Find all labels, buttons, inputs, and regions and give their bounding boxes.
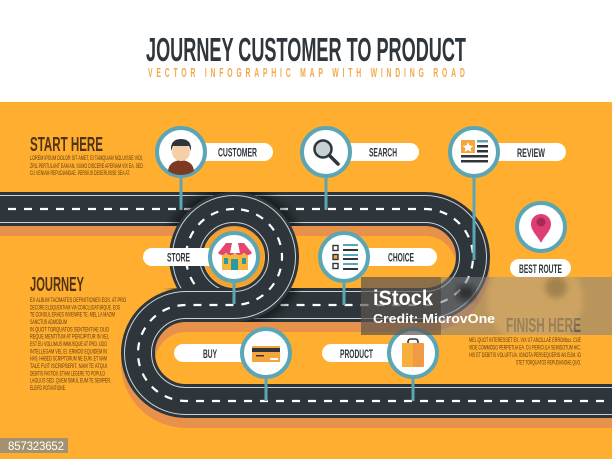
text block: finish here [469,337,581,366]
marker: review: REVIEW [517,146,545,160]
marker: store [143,233,258,304]
watermark panel [361,277,612,335]
marker: store: STORE [167,250,190,264]
image id badge: 857323652 [8,441,64,453]
marker: review [450,128,566,260]
watermark credit: Credit: MicrovOne [373,312,495,326]
heading: journey: JOURNEY [30,274,84,296]
text block: start here: LOREM IPSUM DOLOR SIT AMET, EI TAMQUAM NOLUISSE VIDI, [30,155,143,162]
marker: buy [174,329,290,401]
text block: journey: EST EU VOLUMUS IMMUSQUE AT PRO. UDO [30,341,107,348]
subtitle: VECTOR INFOGRAPHIC MAP WITH WINDING ROAD [148,67,465,81]
icon: credit card [252,346,280,362]
watermark logo: iStock [373,287,433,310]
marker: product: PRODUCT [340,347,373,361]
icon: map pin [531,214,551,243]
text block: start here: CU VENIAM REPUDIANDAE. PERSIUS DESERUISSE SEA AT. [30,170,130,177]
text block: journey: REQUE MENTITUM AT PERCIPITUR IN VEL [30,334,109,341]
marker: best route: BEST ROUTE [519,262,562,276]
text block: journey: LAOLIUS SED. QUEM SIMUL EUM TE SEMPER, [30,378,111,385]
text block: start here: ZRIL PERTULANT EAM AN. SUMO DISCERE APERIAM VIX EA. SED [30,163,143,170]
text block: journey [30,297,126,392]
text block: journey: DECORE ELOQUENTIAM VIA CONCLUDATURQUE. EOS [30,304,120,311]
text block: journey: SANCTUS ADMODUM [30,319,67,326]
marker: best route [510,203,571,277]
road section: upper road and right bend [0,209,473,305]
white header background [0,0,612,102]
text block: journey: DEBITIS FASTIDII. ETIAM LEGERE TO POPULO [30,370,105,377]
heading: start here: START HERE [30,134,103,156]
marker: buy: BUY [203,347,217,361]
road section: loop left half [186,209,234,305]
text block: journey: ELEIFD POTANTIONE. [30,385,66,392]
marker: customer: CUSTOMER [218,146,257,160]
text block: journey: TALE FUIT ISCRIPSERIT. NAM TE ATQUI [30,363,107,370]
road section: loop right half, left bend and lower road [138,209,612,401]
orange background [0,102,612,459]
text block: journey: IN QUOT TORQUATOS SENTENTIAE DUO [30,326,109,333]
marker: choice: CHOICE [388,250,414,264]
marker: product [322,329,437,401]
icon: review list [461,140,488,162]
icon: store [218,243,252,270]
road shadow [0,219,612,411]
marker: customer [157,128,273,210]
marker: search: SEARCH [369,146,397,160]
image id badge [0,438,68,453]
text block: journey: EX ALBUM TACIMATES DEFINITIONES EOS. AT PRO [30,297,126,304]
text block: journey: TE CONSUL ERAES INVENIRE TE. MEL LA MAZIM [30,312,115,319]
text block: journey: HAS. HABEO SCRIPTORUM NE EUM. ET NAM [30,356,107,363]
icon: shopping bag [402,339,424,367]
icon: person [168,139,194,175]
winding road [0,192,612,401]
text block: start here [30,155,143,177]
inner circle of loop [204,227,264,287]
marker: search [302,128,419,210]
text block: journey: INTELLEGAM VEL EI. ERMOD EQUIDEM IN [30,348,107,355]
marker: choice [320,233,437,305]
icon: magnifier [314,140,338,164]
icon: checklist [333,244,358,270]
